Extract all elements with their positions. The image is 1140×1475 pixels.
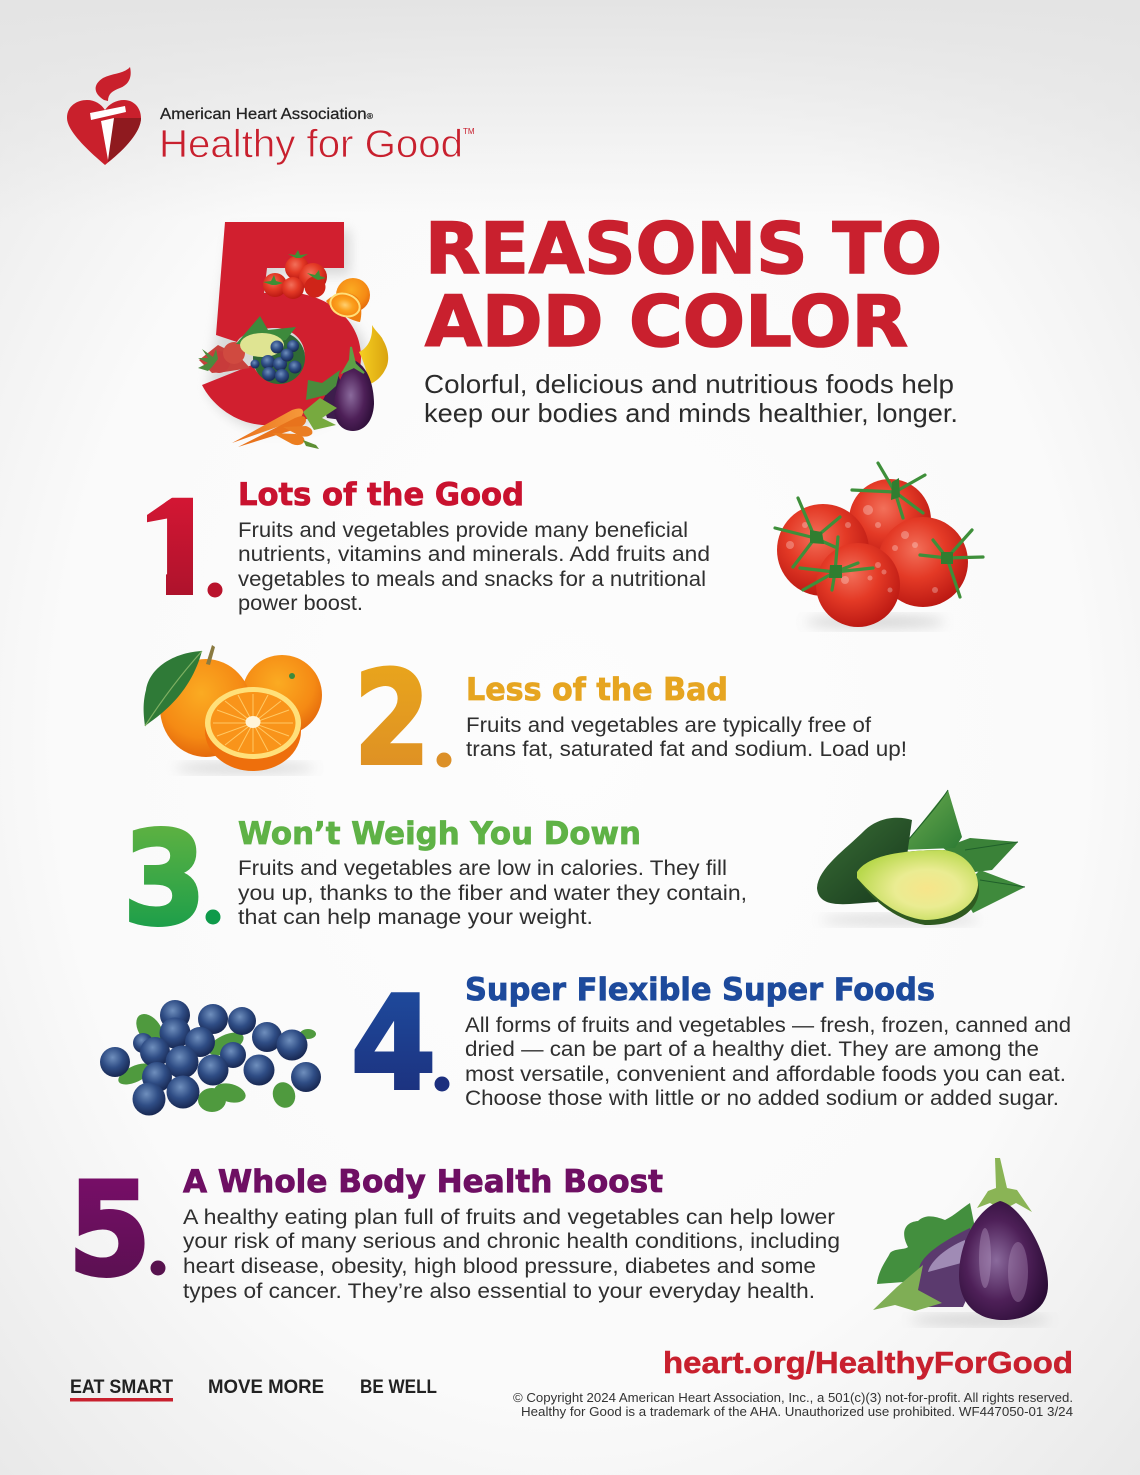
shadow bbox=[208, 230, 368, 430]
mini eggplant bbox=[306, 347, 374, 431]
reason 2 bbox=[144, 645, 907, 794]
logo: American Heart Association Healthy for Good bbox=[67, 67, 475, 166]
mini blueberries bbox=[250, 340, 302, 383]
body text bbox=[465, 1013, 1071, 1110]
mini orange bbox=[326, 278, 370, 322]
copyright: © Copyright 2024 American Heart Association, Inc., a 501(c)(3) not-for-profit. All rights reserved. bbox=[513, 1391, 1073, 1405]
number 5: 5 bbox=[68, 1156, 151, 1305]
body text: Fruits and vegetables are low in calories. They fill bbox=[238, 856, 727, 880]
title bbox=[425, 208, 942, 363]
hero: big number 5 with foods bbox=[198, 222, 388, 449]
subtitle: keep our bodies and minds healthier, longer. bbox=[424, 398, 958, 428]
body text: your risk of many serious and chronic health conditions, including bbox=[183, 1229, 840, 1253]
icon: heart and torch bbox=[67, 67, 141, 165]
number 4: 4 bbox=[351, 970, 436, 1119]
body text: types of cancer. They’re also essential to your everyday health. bbox=[183, 1279, 815, 1303]
image: avocado bbox=[817, 790, 1025, 925]
number 2: 2 bbox=[354, 645, 430, 794]
mini carrots bbox=[232, 398, 337, 449]
heading: Super Flexible Super Foods bbox=[465, 972, 935, 1008]
reason 1 bbox=[129, 463, 983, 628]
footer bbox=[70, 1345, 1073, 1419]
subtitle: Colorful, delicious and nutritious foods help bbox=[424, 369, 954, 399]
text: trademark: TM bbox=[463, 127, 475, 136]
body text: vegetables to meals and snacks for a nutritional bbox=[238, 567, 706, 591]
body text bbox=[238, 518, 710, 615]
subtitle bbox=[424, 369, 958, 428]
copyright bbox=[513, 1391, 1073, 1419]
body text: trans fat, saturated fat and sodium. Load up! bbox=[466, 737, 907, 761]
tagline: eat smart: EAT SMART bbox=[70, 1377, 173, 1398]
body text: most versatile, convenient and affordable foods you can eat. bbox=[465, 1062, 1066, 1086]
heading: A Whole Body Health Boost bbox=[183, 1164, 663, 1200]
heading: Less of the Bad bbox=[466, 672, 728, 708]
title: ADD COLOR bbox=[425, 281, 908, 363]
url: heart.org/HealthyForGood bbox=[663, 1345, 1073, 1380]
image: eggplants bbox=[873, 1158, 1050, 1325]
mini banana bbox=[359, 325, 388, 384]
reason 4 bbox=[100, 970, 1071, 1119]
body text: nutrients, vitamins and minerals. Add fruits and bbox=[238, 542, 710, 566]
text: Healthy for Good: Healthy for Good bbox=[159, 123, 463, 166]
title: REASONS TO bbox=[425, 208, 942, 290]
image: blueberries bbox=[100, 1000, 321, 1116]
body text bbox=[238, 856, 747, 929]
number 3: 3 bbox=[123, 805, 206, 954]
body text: Fruits and vegetables are typically free of bbox=[466, 713, 871, 737]
body text: heart disease, obesity, high blood pressure, diabetes and some bbox=[183, 1254, 816, 1278]
image: oranges bbox=[144, 645, 322, 773]
mini strawberries bbox=[198, 342, 250, 373]
body text: power boost. bbox=[238, 591, 363, 615]
body text: dried — can be part of a healthy diet. They are among the bbox=[465, 1037, 1039, 1061]
tagline: move more: MOVE MORE bbox=[208, 1377, 324, 1398]
reason 5 bbox=[68, 1156, 1050, 1325]
mini avocado and leaves bbox=[236, 316, 305, 384]
mini tomatoes bbox=[263, 250, 327, 299]
body text bbox=[183, 1205, 840, 1303]
body text bbox=[466, 713, 907, 761]
body text: All forms of fruits and vegetables — fresh, frozen, canned and bbox=[465, 1013, 1071, 1037]
body text: you up, thanks to the fiber and water they contain, bbox=[238, 881, 747, 905]
number 5 shape bbox=[202, 222, 361, 425]
body text: Fruits and vegetables provide many beneficial bbox=[238, 518, 688, 542]
tagline: be well: BE WELL bbox=[360, 1377, 437, 1398]
body text: Choose those with little or no added sodium or added sugar. bbox=[465, 1086, 1059, 1110]
body text: A healthy eating plan full of fruits and vegetables can help lower bbox=[183, 1205, 835, 1229]
reason 3 bbox=[123, 790, 1025, 954]
copyright: Healthy for Good is a trademark of the AHA. Unauthorized use prohibited. WF447050-01 3/24 bbox=[521, 1405, 1073, 1419]
heading: Won’t Weigh You Down bbox=[238, 816, 641, 852]
leaves bbox=[115, 1009, 316, 1112]
body text: that can help manage your weight. bbox=[238, 905, 593, 929]
heading: Lots of the Good bbox=[238, 477, 524, 513]
number 1: 1 bbox=[129, 475, 228, 624]
number 1 bbox=[147, 498, 222, 598]
image: tomatoes bbox=[775, 463, 983, 628]
text: American Heart Association: American Heart Association ® bbox=[160, 106, 373, 123]
